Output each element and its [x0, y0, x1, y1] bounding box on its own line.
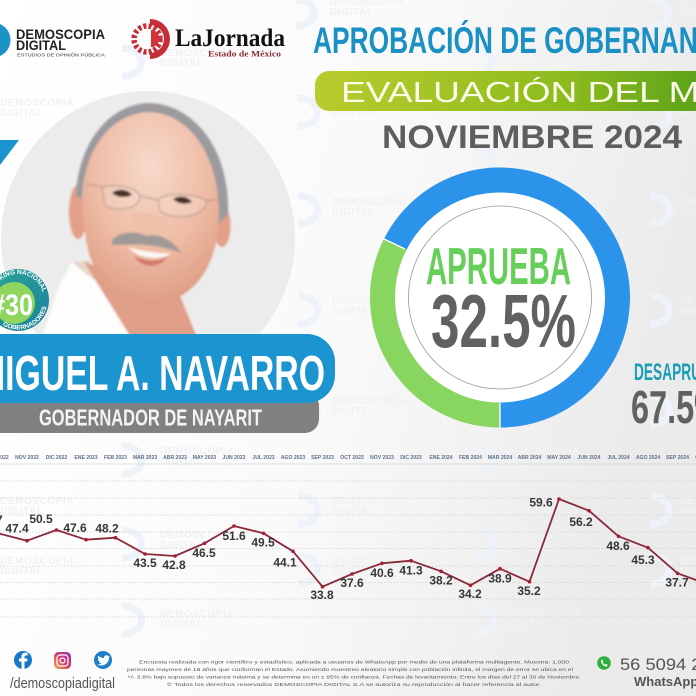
month axis: FEB 2024 — [459, 455, 482, 461]
name plate — [0, 334, 335, 433]
watermark pattern: DEMOSCOPIA — [0, 556, 74, 567]
month axis: NOV 2023 — [370, 455, 394, 461]
month axis: ABR 2023 — [163, 455, 187, 461]
value labels: 56.2 — [569, 515, 593, 529]
watermark pattern: DIGITAL — [332, 207, 375, 218]
lower lip — [134, 256, 168, 266]
month axis: JUL 2024 — [607, 455, 630, 461]
accent triangle — [0, 140, 19, 165]
watermark pattern: DEMOSCOPIA — [332, 556, 406, 567]
value labels: 35.2 — [517, 584, 541, 598]
portrait: Miguel A. Navarro — [42, 103, 230, 338]
methodology note: personas mayores de 18 años que conforman el Estado. Asumiendo muestreo aleatorio simple con población infinita, el margen de error se ubica en el — [127, 667, 573, 673]
role bar — [0, 392, 319, 433]
value labels: 42.8 — [162, 558, 186, 572]
month axis: MAY 2024 — [547, 455, 571, 461]
value labels — [0, 496, 689, 602]
watermark pattern: DIGITAL — [0, 108, 43, 119]
watermark pattern: DEMOSCOPIA — [506, 148, 580, 159]
inner disc — [395, 192, 605, 402]
value labels: 34.2 — [458, 587, 482, 601]
watermark pattern: DIGITAL — [332, 108, 375, 119]
data points — [25, 497, 679, 588]
watermark pattern: DEMOSCOPIA — [0, 98, 74, 109]
trend line — [0, 499, 696, 587]
watermark pattern: DEMOSCOPIA — [332, 496, 406, 507]
watermark pattern: DIGITAL — [332, 566, 375, 577]
value labels: 38.2 — [429, 574, 453, 588]
watermark pattern: DIGITAL — [0, 506, 43, 517]
ring segment: aprueba — [383, 244, 500, 415]
watermark pattern: DEMOSCOPIA — [332, 396, 406, 407]
watermark pattern: DEMOSCOPIA — [506, 609, 580, 620]
line chart: monthly approval trend — [0, 455, 696, 617]
value labels: 50.5 — [29, 512, 53, 526]
value labels: 59.6 — [529, 496, 553, 510]
month axis: NOV 2022 — [15, 455, 39, 461]
value labels: 49.5 — [251, 536, 275, 550]
watermark pattern: DEMOSCOPIA — [160, 446, 234, 457]
methodology note: Encuesta realizada con rigor científico y estadístico, aplicada a usuarios de WhatsApp por medio de una plataforma multiagente. Muestra: 1,000 — [139, 660, 569, 666]
icon: facebook — [14, 651, 32, 669]
value labels: 43.5 — [133, 556, 157, 570]
watermark pattern: DIGITAL — [506, 58, 549, 69]
value labels: 33.8 — [310, 588, 334, 602]
value labels: 46.5 — [192, 546, 216, 560]
month axis: SEP 2024 — [666, 455, 689, 461]
portrait backdrop circle — [1, 91, 295, 385]
month axis: ABR 2024 — [518, 455, 542, 461]
watermark pattern: DIGITAL — [160, 619, 203, 630]
logo: Demoscopia Digital — [0, 22, 106, 58]
watermark pattern: DIGITAL — [332, 506, 375, 517]
watermark pattern: DIGITAL — [506, 456, 549, 467]
value labels: 40.6 — [370, 566, 394, 580]
value labels: 37.7 — [665, 576, 689, 590]
face — [82, 112, 219, 305]
icon: twitter — [94, 651, 112, 669]
watermark pattern: DEMOSCOPIA — [506, 530, 580, 541]
value labels: 48.6 — [606, 539, 630, 553]
month axis: MAR 2024 — [488, 455, 512, 461]
month axis — [0, 455, 696, 461]
watermark pattern: DIGITAL — [332, 406, 375, 417]
logo: Demoscopia Digital: DIGITAL — [16, 37, 66, 53]
social handle: /demoscopiadigital — [10, 675, 115, 692]
value labels: 48.2 — [95, 522, 119, 536]
subtitle pill — [315, 71, 696, 111]
watermark pattern: DIGITAL — [506, 540, 549, 551]
icon: whatsapp — [597, 656, 611, 670]
month axis: FEB 2023 — [104, 455, 127, 461]
hair — [76, 103, 228, 225]
approval value: 32.5% — [431, 279, 576, 363]
watermark pattern: DIGITAL — [160, 540, 203, 551]
whatsapp contact — [620, 655, 696, 689]
month axis: AGO 2024 — [636, 455, 660, 461]
donut chart: approval — [383, 180, 618, 428]
methodology note — [127, 660, 581, 688]
value labels: 41.3 — [399, 564, 423, 578]
icon: instagram — [54, 652, 71, 669]
smile — [128, 247, 171, 258]
watermark pattern: DEMOSCOPIA — [506, 48, 580, 59]
month axis: DIC 2022 — [46, 455, 67, 461]
month axis: JUN 2023 — [223, 455, 246, 461]
watermark pattern: DEMOSCOPIA — [160, 48, 234, 59]
methodology note: © Todos los derechos reservados DEMOSCOPIA DIGITAL S.A se autoriza su reproducción al hacer referencia al autor. — [167, 681, 541, 688]
glasses — [86, 184, 219, 217]
mustache — [112, 233, 182, 253]
watermark pattern: DIGITAL — [160, 456, 203, 467]
seams — [384, 239, 500, 428]
value labels: 44.1 — [273, 556, 297, 570]
watermark pattern: DIGITAL — [506, 158, 549, 169]
month axis: ENE 2024 — [429, 455, 453, 461]
nose — [132, 212, 168, 233]
value labels: 51.6 — [222, 529, 246, 543]
eyes — [112, 190, 192, 204]
right ear — [214, 205, 230, 247]
collar shade — [72, 260, 190, 332]
value labels: 37.6 — [340, 576, 364, 590]
month axis: ENE 2023 — [74, 455, 98, 461]
logo: Demoscopia Digital: DEMOSCOPIA — [16, 26, 105, 42]
shirt — [42, 258, 200, 338]
value labels: 47.4 — [5, 522, 29, 536]
role: GOBERNADOR DE NAYARIT — [39, 404, 262, 430]
date heading: NOVIEMBRE 2024 — [382, 119, 682, 155]
subtitle pill: EVALUACIÓN DEL MES — [341, 77, 696, 109]
watermark pattern: DEMOSCOPIA — [160, 609, 234, 620]
month axis: JUN 2024 — [578, 455, 601, 461]
month axis: SEP 2023 — [311, 455, 334, 461]
watermark pattern: DEMOSCOPIA — [160, 530, 234, 541]
watermark pattern: DIGITAL — [0, 566, 43, 577]
ring segment: desaprueba — [395, 180, 618, 415]
value labels: 47.6 — [63, 521, 87, 535]
logo: La Jornada: Estado de México — [208, 48, 282, 58]
watermark pattern: DEMOSCOPIA — [332, 296, 406, 307]
badge: ranking nacional: GOBERNADORES — [3, 306, 46, 330]
name bar — [0, 334, 335, 403]
month axis: JUL 2023 — [252, 455, 275, 461]
watermark pattern: DIGITAL — [330, 7, 373, 18]
left ear — [69, 185, 87, 239]
inner thin ring — [408, 206, 592, 389]
badge: ranking nacional — [0, 269, 49, 331]
watermark pattern: DIGITAL — [160, 58, 203, 69]
month axis: OCT 2023 — [340, 455, 364, 461]
logo: Demoscopia Digital: ESTUDIOS DE OPINIÓN PÚBLICA — [17, 50, 106, 58]
watermark pattern: DEMOSCOPIA — [332, 197, 406, 208]
watermark pattern: DIGITAL — [506, 619, 549, 630]
watermark pattern: DEMOSCOPIA — [332, 98, 406, 109]
month axis: MAY 2023 — [193, 455, 216, 461]
watermark pattern: DEMOSCOPIA — [0, 496, 74, 507]
watermark pattern: DEMOSCOPIA — [506, 446, 580, 457]
month axis: MAR 2023 — [133, 455, 157, 461]
logo: La Jornada — [134, 19, 285, 59]
watermark pattern: DIGITAL — [332, 306, 375, 317]
month axis: DIC 2023 — [400, 455, 422, 461]
neck — [84, 262, 197, 336]
month axis: AGO 2023 — [281, 455, 305, 461]
logo: La Jornada: LaJornada — [175, 25, 285, 52]
value labels: 45.3 — [631, 553, 655, 567]
approval label: APRUEBA — [426, 238, 571, 296]
methodology note: +/- 3.8% bajo supuesto de varianza máxima y se determina en un ± 95% de confianza. Fechas de levantamiento: Entre los días del 27 al 30 de Noviembre. — [127, 674, 581, 680]
value labels: 38.9 — [488, 572, 512, 586]
